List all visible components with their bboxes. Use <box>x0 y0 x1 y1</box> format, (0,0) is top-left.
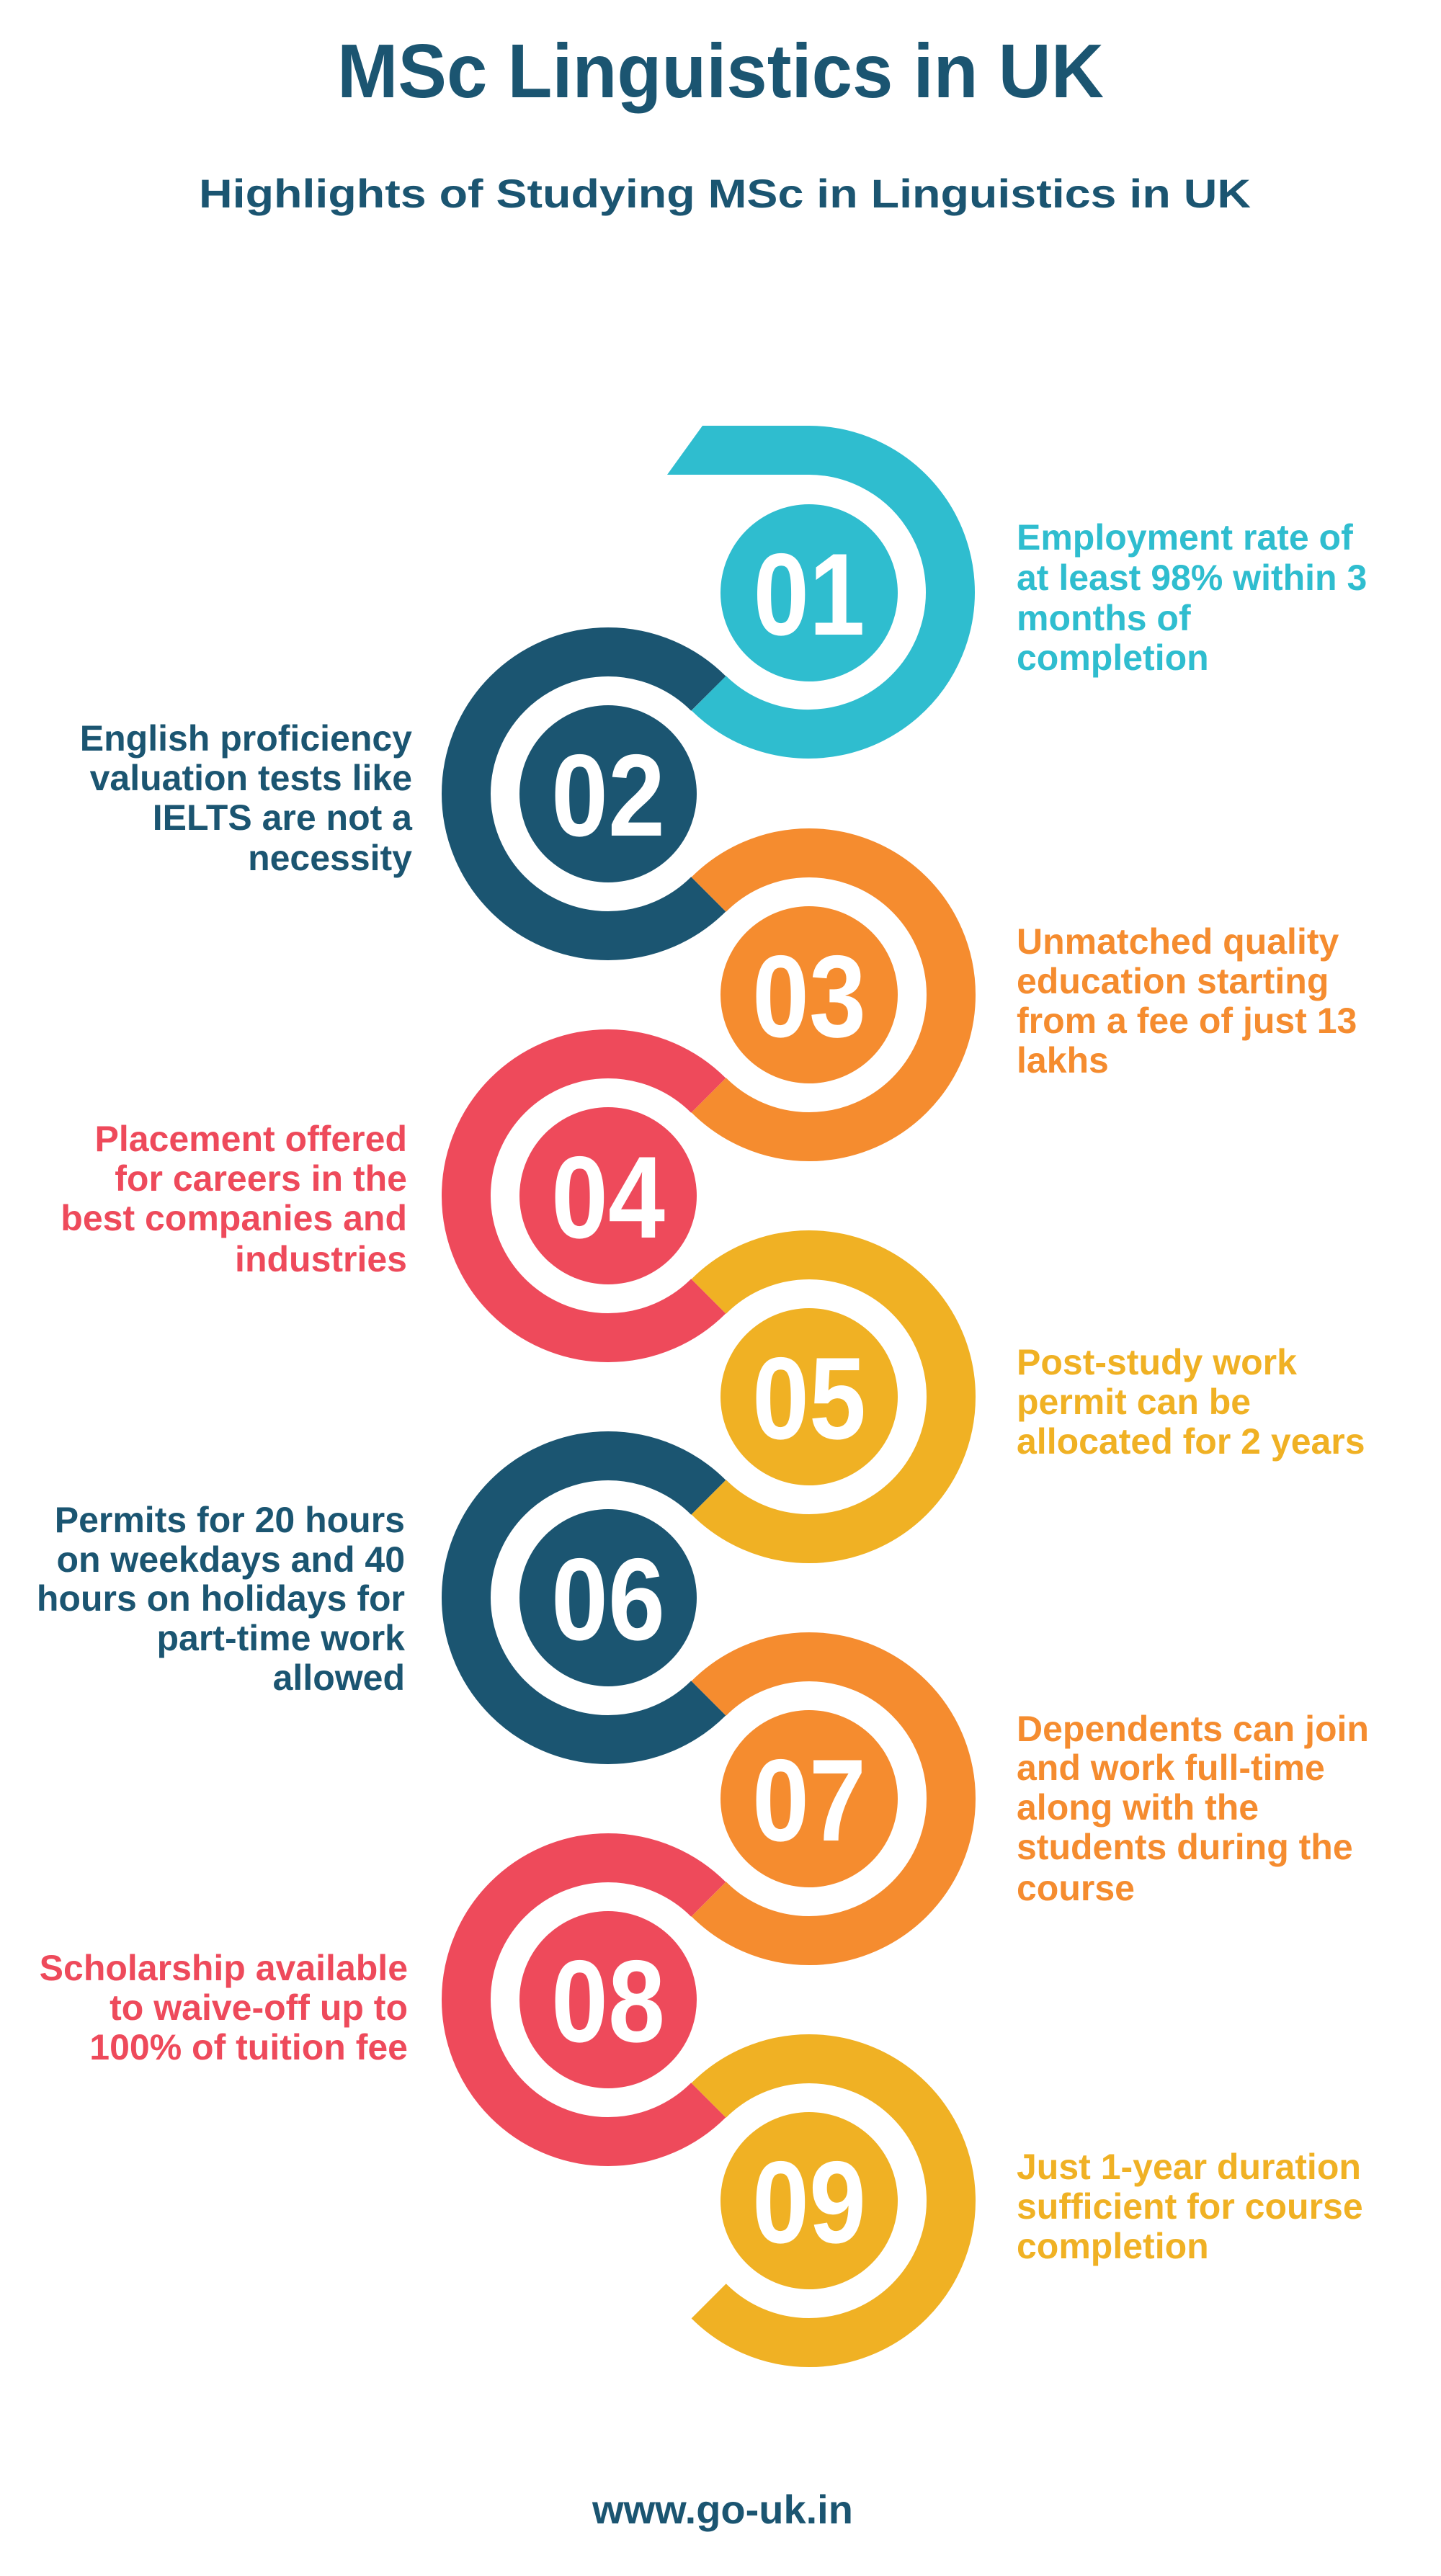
text 07: and work full-time <box>1017 1748 1325 1788</box>
subtitle: Highlights of Studying MSc in Linguistics in UK <box>199 171 1251 216</box>
text 01: at least 98% within 3 <box>1017 558 1367 598</box>
text 06: on weekdays and 40 <box>56 1539 405 1580</box>
text 06: hours on holidays for <box>37 1578 405 1619</box>
item 06: 06 <box>551 1534 665 1665</box>
text 08: 100% of tuition fee <box>89 2027 408 2067</box>
text 06: allowed <box>273 1658 405 1698</box>
text 02: valuation tests like <box>90 758 412 798</box>
text 09: completion <box>1017 2226 1209 2266</box>
text 08: Scholarship available <box>40 1948 408 1988</box>
item 01 <box>667 426 950 734</box>
text 09: Just 1-year duration <box>1017 2147 1361 2187</box>
text 01: completion <box>1017 638 1209 678</box>
text 09: sufficient for course <box>1017 2186 1363 2227</box>
text 02: necessity <box>248 838 412 878</box>
item 05: 05 <box>752 1333 866 1464</box>
item 09: 09 <box>752 2137 866 2268</box>
text 06: part-time work <box>156 1618 405 1658</box>
item 03 <box>709 853 951 1137</box>
item 07 <box>709 1657 951 1941</box>
text 06: Permits for 20 hours <box>55 1500 405 1540</box>
text 01: Employment rate of <box>1017 517 1353 558</box>
text 02: IELTS are not a <box>153 797 413 838</box>
text 04: best companies and <box>61 1198 407 1238</box>
title: MSc Linguistics in UK <box>337 29 1104 114</box>
text 07: Dependents can join <box>1017 1709 1369 1749</box>
item 05 <box>709 1255 951 1539</box>
text 03: lakhs <box>1017 1040 1109 1081</box>
text 03: from a fee of just 13 <box>1017 1001 1357 1041</box>
item 09 <box>709 2059 951 2343</box>
text 05: allocated for 2 years <box>1017 1421 1365 1462</box>
text 07: along with the <box>1017 1787 1259 1828</box>
text 04: industries <box>235 1239 407 1279</box>
text 03: education starting <box>1017 961 1329 1001</box>
text 02: English proficiency <box>80 718 412 759</box>
item 06 <box>466 1456 708 1740</box>
item 07: 07 <box>752 1735 866 1866</box>
text 04: Placement offered <box>95 1119 407 1159</box>
text 05: permit can be <box>1017 1382 1251 1422</box>
item 02: 02 <box>551 730 665 861</box>
text 05: Post-study work <box>1017 1342 1297 1382</box>
text 07: students during the <box>1017 1827 1353 1867</box>
text 08: to waive-off up to <box>110 1987 408 2028</box>
item 04: 04 <box>551 1132 665 1263</box>
item 02 <box>466 652 708 936</box>
item 04 <box>466 1054 708 1338</box>
item 01: 01 <box>754 529 865 660</box>
text 01: months of <box>1017 598 1191 638</box>
footer url: www.go-uk.in <box>592 2487 853 2532</box>
item 08: 08 <box>551 1936 665 2067</box>
text 03: Unmatched quality <box>1017 921 1339 962</box>
text 04: for careers in the <box>115 1158 407 1199</box>
item 08 <box>466 1858 708 2142</box>
item 03: 03 <box>752 931 866 1062</box>
text 07: course <box>1017 1868 1135 1908</box>
